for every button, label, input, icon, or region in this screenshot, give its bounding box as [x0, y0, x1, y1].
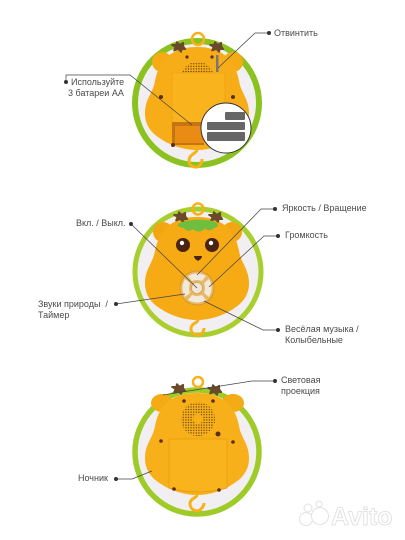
- eyes: [176, 238, 219, 252]
- callout: light projection: проекция: [281, 386, 320, 396]
- callout: nature sounds: Звуки природы /: [38, 299, 108, 309]
- hook: [189, 150, 202, 167]
- callout: batteries: [64, 75, 192, 125]
- nose: [194, 256, 202, 261]
- battery compartment: [172, 122, 204, 145]
- watermark: Avito: Avito: [331, 503, 393, 531]
- battery inset: [201, 103, 251, 153]
- hanging loop: [193, 377, 203, 387]
- callout: light projection: [163, 375, 321, 396]
- green ring: [135, 209, 261, 335]
- hook: [191, 320, 204, 335]
- hook: [190, 495, 204, 511]
- hanging loop: [192, 204, 204, 214]
- speaker grille: [181, 402, 215, 436]
- screwdriver: [216, 55, 218, 72]
- screws: [159, 55, 235, 147]
- callout: on/off: Вкл. / Выкл.: [76, 218, 126, 228]
- callout: music: Колыбельные: [285, 335, 343, 345]
- callout: volume: Громкость: [285, 230, 328, 240]
- callout: volume: [209, 230, 328, 287]
- battery cover: [169, 439, 227, 492]
- control pad: [180, 271, 214, 305]
- toy body front: [145, 217, 249, 320]
- toy body back: [145, 393, 249, 495]
- screws: [159, 399, 235, 492]
- callout: batteries: Используйте: [71, 77, 124, 87]
- panel: battery installation view: [64, 28, 318, 167]
- callout: nature sounds: [38, 294, 185, 320]
- callout: music: [204, 301, 359, 345]
- panel: front controls view: [38, 203, 367, 345]
- toy body back: [145, 47, 249, 150]
- callout: music: Весёлая музыка /: [285, 324, 359, 334]
- green leaf: [178, 220, 218, 232]
- callout: light projection: Световая: [281, 375, 321, 385]
- antlers: [172, 42, 223, 52]
- hanging loop: [192, 33, 204, 45]
- callout: brightness: [197, 203, 367, 275]
- callout: night light: Ночник: [78, 473, 108, 483]
- callout: night light: [78, 471, 152, 483]
- callout: nature sounds: Таймер: [38, 310, 69, 320]
- callout: batteries: 3 батареи АА: [68, 88, 124, 98]
- callout: unscrew: [218, 28, 318, 68]
- green ring: [135, 390, 259, 514]
- panel: back view: [78, 375, 321, 514]
- callout: on/off: [76, 218, 197, 288]
- battery cover outline: [172, 73, 225, 125]
- green ring: [135, 41, 259, 165]
- watermark: Avito: [300, 501, 393, 531]
- callout: brightness: Яркость / Вращение: [282, 203, 367, 213]
- speaker grille: [182, 62, 213, 73]
- antlers: [174, 212, 222, 222]
- antlers: [172, 384, 221, 395]
- callout: unscrew: Отвинтить: [274, 28, 318, 38]
